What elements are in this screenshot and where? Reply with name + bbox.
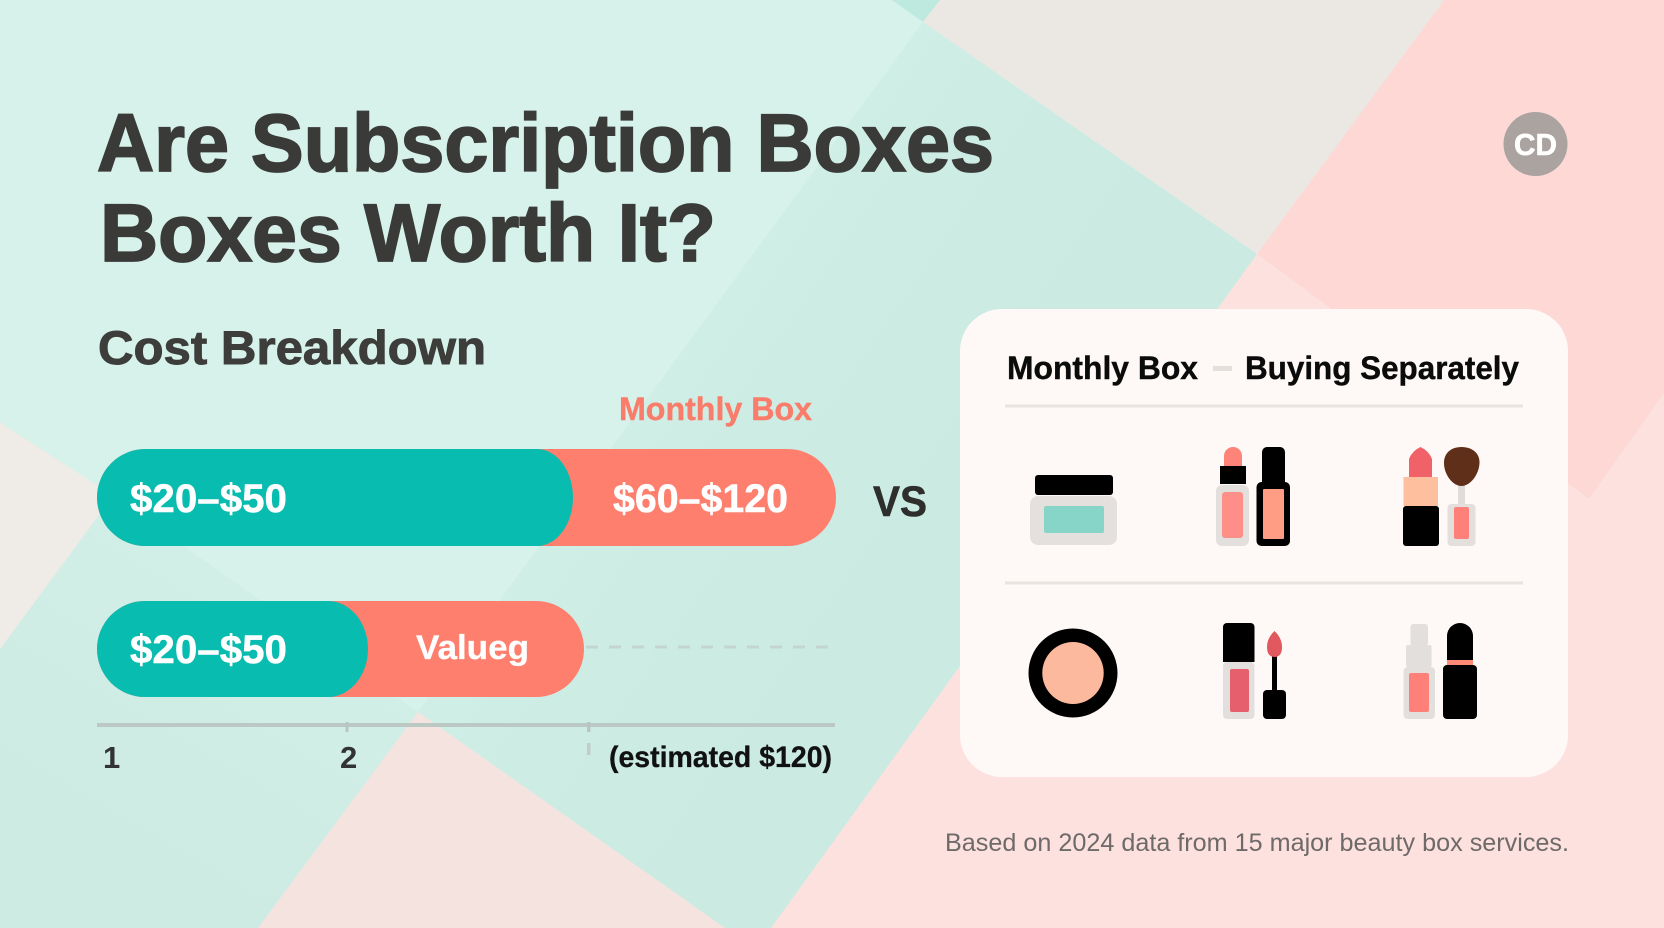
- bar: box value: $20–$50: [130, 628, 287, 672]
- bar: box value: Valueg: [416, 629, 529, 667]
- axis: (estimated $120): [609, 741, 832, 774]
- label: vs: VS: [873, 478, 927, 526]
- card heading: Buying Separately: [1245, 350, 1519, 386]
- icon: powder compact: [1028, 628, 1118, 718]
- icon: gloss and wand: [1223, 623, 1286, 719]
- title: [97, 98, 994, 279]
- icon: lipstick and brush: [1403, 447, 1480, 546]
- card heading: Monthly Box: [1007, 350, 1198, 386]
- bar: monthly box vs retail: [97, 449, 836, 546]
- label: monthly box: Monthly Box: [619, 391, 812, 427]
- axis: [97, 722, 835, 775]
- avatar badge: CD: [1504, 112, 1568, 176]
- title: Are Subscription Boxes: [97, 98, 994, 189]
- heading: cost breakdown: Cost Breakdown: [98, 321, 486, 374]
- card heading: [1007, 350, 1519, 386]
- bar: monthly box vs retail: $20–$50: [130, 477, 287, 521]
- bar: monthly box vs retail: $60–$120: [613, 477, 788, 521]
- icon: bottle and lipstick: [1404, 623, 1477, 719]
- axis: 2: [340, 740, 357, 775]
- title: Boxes Worth It?: [100, 188, 716, 279]
- axis: 1: [103, 740, 120, 775]
- icon: lip tint and foundation: [1216, 447, 1290, 546]
- source note: Based on 2024 data from 15 major beauty box services.: [945, 829, 1569, 857]
- dashed extension line: [586, 646, 835, 648]
- avatar badge: CD: CD: [1514, 127, 1557, 162]
- panel: product comparison card: [960, 309, 1568, 777]
- bar: box value: [97, 601, 584, 697]
- icon: cream jar: [1030, 475, 1117, 545]
